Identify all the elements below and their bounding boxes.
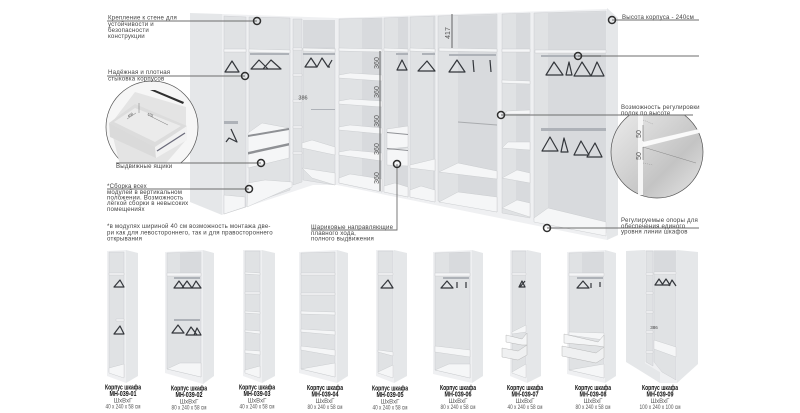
dimensions on the shelves: 360 bbox=[374, 57, 381, 69]
caption 01: Корпус шкафа bbox=[105, 384, 141, 392]
footnote: door mounting: открывания bbox=[107, 236, 142, 242]
caption 07: Корпус шкафа bbox=[507, 385, 543, 392]
callout lines and markers bbox=[107, 16, 699, 232]
caption 09: МН-039-09 bbox=[646, 392, 674, 398]
caption 02: 80 х 240 х 58 см bbox=[172, 406, 206, 412]
dimensions on the shelves: 360 bbox=[374, 143, 381, 155]
label: ball guides: полного выдвижения bbox=[311, 236, 374, 242]
caption 02: Корпус шкафа bbox=[171, 386, 207, 392]
caption 01: 40 х 240 х 58 см bbox=[106, 404, 140, 410]
caption 03: МН-039-03 bbox=[244, 391, 271, 398]
label: vertical assembly: помещениях bbox=[107, 206, 145, 213]
main corner wardrobe bbox=[190, 8, 618, 240]
label: wall fixing: конструкции bbox=[108, 33, 145, 40]
label: vertical assembly: *Сборка всех bbox=[107, 183, 147, 190]
caption 02: ШхВхГ bbox=[180, 400, 199, 406]
caption 08: ШхВхГ bbox=[584, 399, 603, 405]
label: ball guides: плавного хода, bbox=[311, 230, 356, 237]
caption 05: 40 х 240 х 58 см bbox=[372, 406, 408, 412]
module MH-039-01 bbox=[107, 250, 138, 383]
label: wall fixing: устойчивости и bbox=[108, 21, 154, 28]
module MH-039-06 bbox=[433, 250, 483, 383]
caption 05: Корпус шкафа bbox=[372, 386, 408, 392]
detail circle: drawer bbox=[106, 81, 198, 173]
caption 07: 40 х 240 х 58 см bbox=[508, 405, 542, 411]
caption 07: МН-039-07 bbox=[512, 392, 539, 398]
caption 01: ШхВхГ bbox=[114, 398, 133, 404]
dimensions on the shelves bbox=[298, 14, 452, 191]
module MH-039-03 bbox=[243, 250, 275, 383]
detail circle: shelf support: 50 bbox=[636, 130, 643, 138]
label: wall fixing: Крепление к стене для bbox=[108, 14, 177, 22]
module MH-039-09 bbox=[626, 250, 698, 383]
label: height: Высота корпуса - 240см bbox=[622, 14, 694, 21]
label: adjustable feet: уровня линии шкафов bbox=[621, 228, 688, 236]
caption 08: Корпус шкафа bbox=[575, 385, 611, 392]
caption 08: МН-039-08 bbox=[580, 392, 607, 398]
caption 06: МН-039-06 bbox=[444, 392, 472, 398]
module MH-039-02 bbox=[165, 250, 214, 384]
footnote: door mounting: *в модулях шириной 40 см возможность монтажа две- bbox=[107, 223, 271, 230]
caption 07: ШхВхГ bbox=[516, 399, 535, 405]
dimensions on the shelves: 360 bbox=[374, 86, 381, 98]
detail circle: drawer: 575 bbox=[147, 112, 154, 118]
caption 06: Корпус шкафа bbox=[440, 385, 476, 392]
label: ball guides: Шариковые направляющие bbox=[311, 224, 394, 231]
label: tight joining: стыковка корпусов bbox=[108, 76, 164, 82]
caption 03: Корпус шкафа bbox=[239, 384, 275, 392]
caption 03: ШхВхГ bbox=[248, 398, 267, 404]
caption 04: 80 х 240 х 58 см bbox=[308, 405, 342, 411]
caption 01: МН-039-01 bbox=[110, 391, 137, 398]
footnote: door mounting: ри как для левостороннего, так и для правостороннего bbox=[107, 230, 273, 236]
module MH-039-05 bbox=[376, 250, 407, 383]
caption 09: 100 х 240 х 100 см bbox=[640, 405, 680, 411]
right section modules bbox=[337, 8, 618, 240]
caption 05: МН-039-05 bbox=[376, 392, 404, 399]
caption 09: Корпус шкафа bbox=[642, 385, 678, 392]
dimensions on the shelves: 417 bbox=[445, 27, 452, 39]
left module side and front bbox=[190, 13, 337, 215]
label: drawers: Выдвижные ящики bbox=[116, 163, 172, 170]
detail circle: shelf support: 50 bbox=[636, 152, 643, 160]
caption 04: МН-039-04 bbox=[312, 392, 339, 398]
caption 03: 40 х 240 х 58 см bbox=[240, 404, 274, 410]
caption 06: 80 х 240 х 58 см bbox=[440, 405, 476, 411]
detail circle: drawer: 450 bbox=[127, 112, 134, 118]
dimensions on the shelves: 360 bbox=[374, 115, 381, 127]
caption 09: ШхВхГ bbox=[651, 399, 670, 405]
dimensions on the shelves: 360 bbox=[374, 172, 381, 184]
caption 04: ШхВхГ bbox=[316, 399, 335, 405]
detail circle: shelf support bbox=[611, 106, 703, 198]
module MH-039-07 bbox=[502, 250, 541, 383]
label: adjustable feet: обеспечения единого bbox=[621, 223, 686, 230]
caption 05: ШхВхГ bbox=[381, 400, 400, 406]
label: vertical assembly: модулей в вертикальном bbox=[107, 189, 182, 196]
module MH-039-09: 386 bbox=[650, 325, 658, 330]
caption 04: Корпус шкафа bbox=[307, 385, 343, 392]
label: vertical assembly: лёгкой сборки в невысоких bbox=[107, 200, 188, 207]
label: tight joining: Надёжная и плотная bbox=[108, 69, 170, 76]
dimensions on the shelves: 386 bbox=[298, 96, 308, 102]
label: shelf adjustment: Возможность регулировки bbox=[621, 104, 700, 111]
label: wall fixing: безопасности bbox=[108, 27, 149, 34]
caption 02: МН-039-02 bbox=[176, 392, 203, 399]
module MH-039-08 bbox=[562, 250, 616, 383]
caption 08: 80 х 240 х 58 см bbox=[576, 405, 610, 411]
label: vertical assembly: положении. Возможность bbox=[107, 194, 183, 202]
label: adjustable feet: Регулируемые опоры для bbox=[621, 217, 698, 224]
caption 06: ШхВхГ bbox=[449, 399, 468, 405]
label: shelf adjustment: полок по высоте bbox=[621, 110, 671, 117]
module MH-039-04 bbox=[299, 250, 348, 383]
